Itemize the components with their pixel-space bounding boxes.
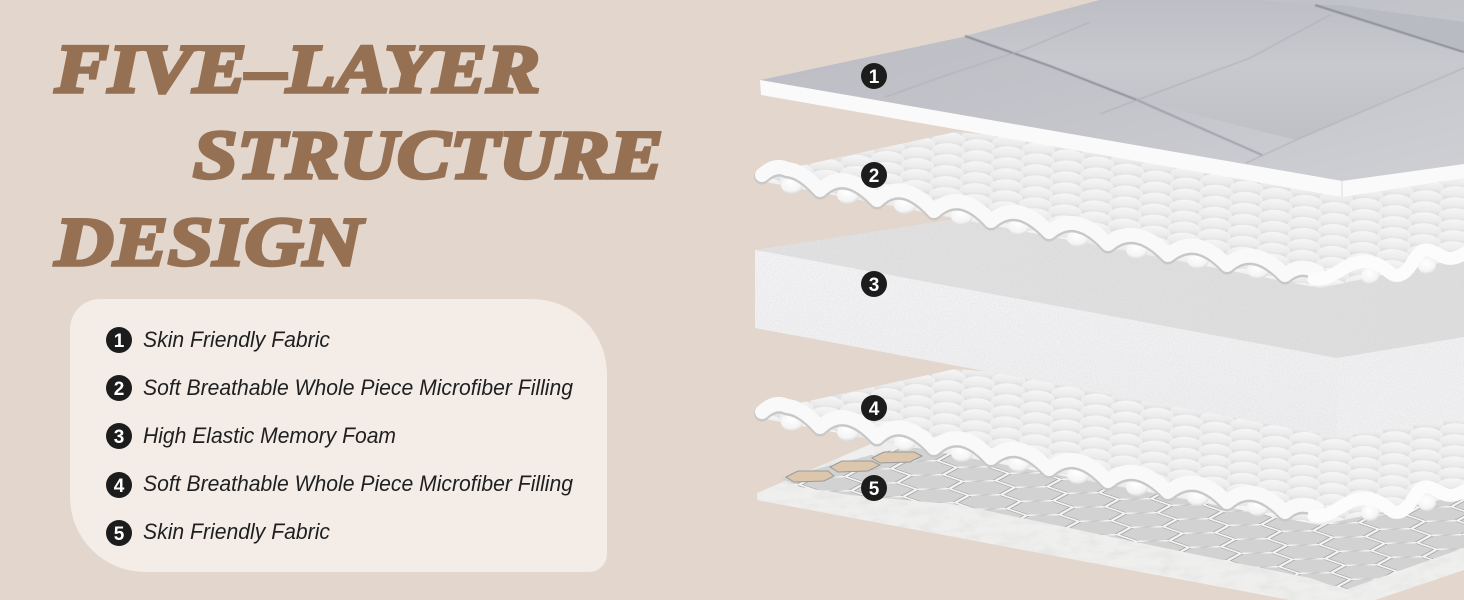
panel: layer legend <box>70 299 607 572</box>
legend item 5: 5 <box>114 524 125 545</box>
marker 5 <box>861 475 887 501</box>
foam side face <box>1337 337 1464 437</box>
marker 5: 5 <box>869 479 880 500</box>
legend item 2: 2 <box>114 379 124 400</box>
title: STRUCTURE <box>193 117 663 193</box>
legend item 4: 4 <box>114 476 125 497</box>
title <box>54 31 663 280</box>
title: FIVE–LAYER <box>54 31 540 107</box>
marker 4: 4 <box>869 399 880 420</box>
quilted panels <box>965 0 1464 140</box>
marker 2: 2 <box>869 166 879 187</box>
legend item 2: Soft Breathable Whole Piece Microfiber Filling <box>143 375 574 400</box>
layer 5: skin friendly fabric base <box>757 440 1464 600</box>
white edge <box>760 80 1464 197</box>
marker 3: 3 <box>869 275 879 296</box>
legend item 3: 3 <box>114 427 124 448</box>
layer 1: quilted top fabric <box>760 0 1464 197</box>
marker 1 <box>861 63 887 89</box>
front wave ribbon <box>762 167 1464 284</box>
hexagon mesh <box>780 448 1464 590</box>
marker 3 <box>861 271 887 297</box>
marker 2 <box>861 162 887 188</box>
foam front face <box>755 250 1337 437</box>
legend item 3: High Elastic Memory Foam <box>143 423 396 448</box>
layer 3: memory foam <box>755 212 1464 437</box>
legend item 4: Soft Breathable Whole Piece Microfiber Filling <box>143 471 574 496</box>
legend item 1: 1 <box>114 331 125 352</box>
legend item 1: Skin Friendly Fabric <box>143 327 330 352</box>
marker 1: 1 <box>869 67 880 88</box>
layer 2: microfiber filling <box>754 132 1464 288</box>
layer 4: microfiber filling <box>754 369 1464 525</box>
quilting seams <box>885 5 1464 163</box>
title: DESIGN <box>54 204 365 280</box>
beige exposed hexagons <box>786 452 922 482</box>
marker 4 <box>861 395 887 421</box>
legend item 5: Skin Friendly Fabric <box>143 519 330 544</box>
